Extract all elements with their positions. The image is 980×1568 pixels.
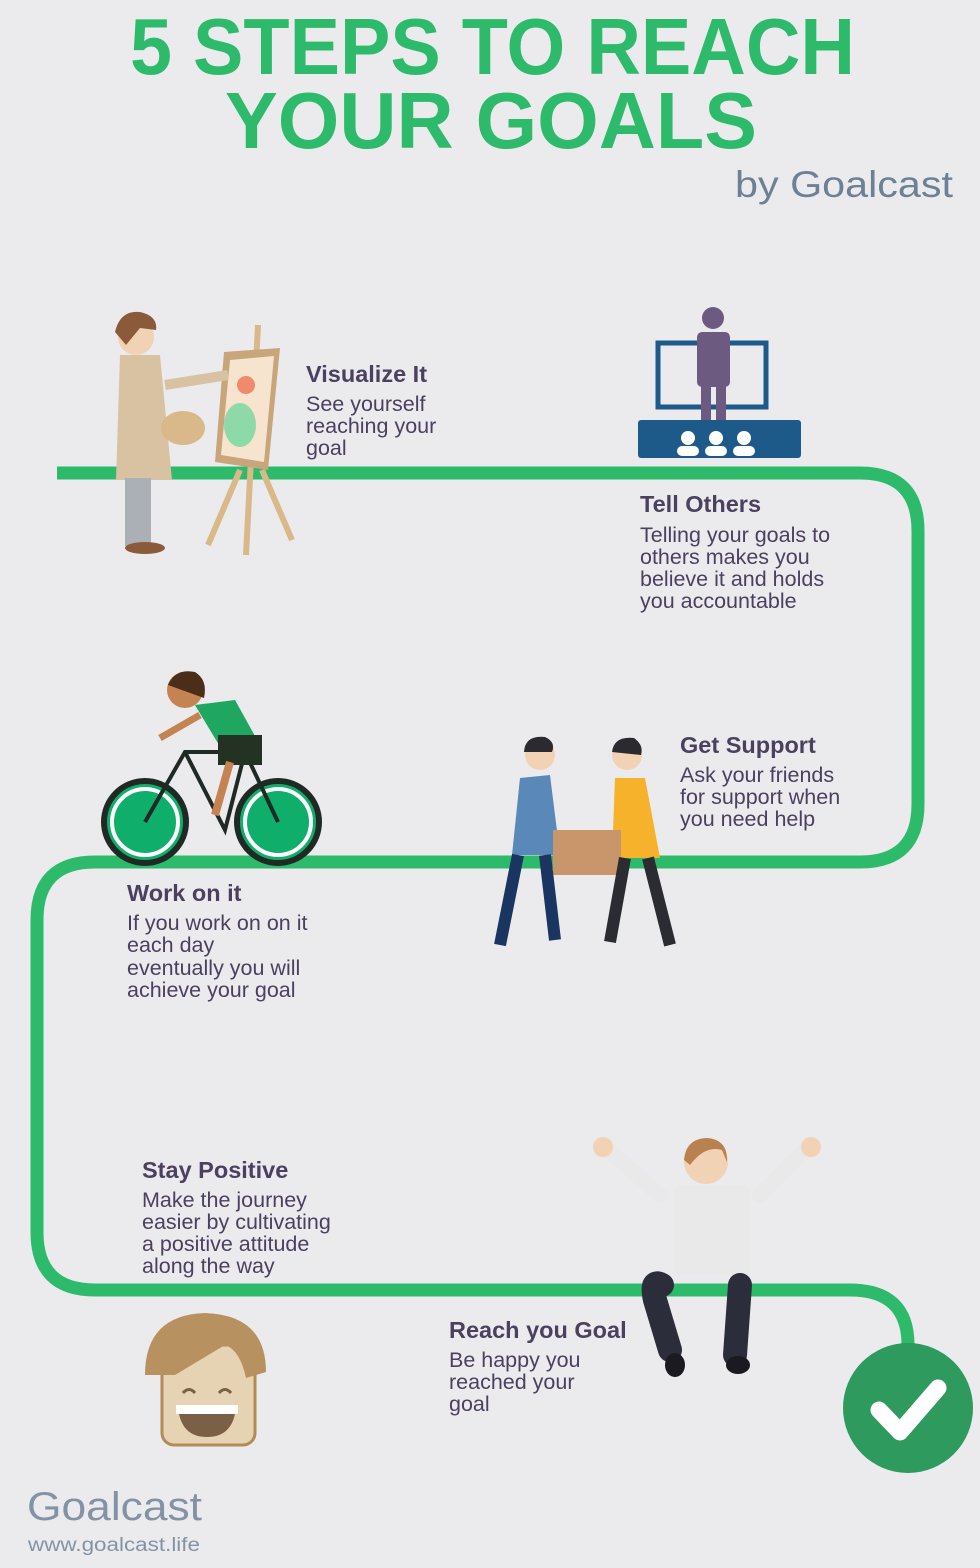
heading: Visualize It: reaching your [306, 414, 436, 438]
heading: Stay Positive: Make the journey [142, 1188, 307, 1212]
heading: Work on it: If you work on on it [127, 911, 307, 935]
heading: Tell Others [640, 491, 830, 613]
green path [37, 473, 918, 1345]
heading: Visualize It: See yourself [306, 392, 426, 416]
heading: Work on it: each day [127, 933, 215, 957]
heading: Tell Others: you accountable [640, 589, 797, 613]
heading: Stay Positive: easier by cultivating [142, 1210, 331, 1234]
icon: two people carrying box [500, 737, 670, 945]
heading: Tell Others: Tell Others [640, 491, 761, 517]
heading: Tell Others: believe it and holds [640, 567, 824, 591]
heading: Stay Positive: Stay Positive [142, 1157, 288, 1183]
icon: cyclist [104, 671, 319, 863]
heading: Get Support [680, 732, 840, 831]
title [130, 2, 855, 165]
heading: Work on it [127, 880, 307, 1002]
heading: Visualize It: goal [306, 436, 347, 460]
heading: Visualize It [306, 361, 436, 460]
icon: smiling face [145, 1313, 266, 1445]
heading: Get Support: Get Support [680, 732, 816, 758]
heading: Work on it: eventually you will [127, 956, 300, 980]
subtitle: by Goalcast: by Goalcast [735, 164, 954, 205]
icon: presenter with audience [638, 307, 801, 458]
heading: Stay Positive [142, 1157, 331, 1278]
heading: Reach you Goal: goal [449, 1392, 490, 1416]
heading: Tell Others: others makes you [640, 545, 810, 569]
footer logo: www.goalcast.life [27, 1535, 200, 1556]
heading: Reach you Goal: Reach you Goal [449, 1317, 627, 1343]
heading: Stay Positive: a positive attitude [142, 1232, 309, 1256]
icon: cheering man [593, 1137, 821, 1377]
footer logo: Goalcast [27, 1485, 202, 1529]
heading: Reach you Goal: reached your [449, 1370, 574, 1394]
heading: Work on it: Work on it [127, 880, 242, 906]
heading: Visualize It: Visualize It [306, 361, 427, 387]
heading: Get Support: Ask your friends [680, 763, 834, 787]
title: 5 STEPS TO REACH [130, 2, 855, 91]
icon: painter with easel [115, 312, 292, 555]
footer logo [27, 1485, 202, 1556]
heading: Reach you Goal [449, 1317, 627, 1416]
heading: Get Support: for support when [680, 785, 840, 809]
icon: check circle [843, 1343, 973, 1473]
heading: Stay Positive: along the way [142, 1254, 275, 1278]
heading: Get Support: you need help [680, 807, 815, 831]
heading: Tell Others: Telling your goals to [640, 523, 830, 547]
title: YOUR GOALS [225, 76, 757, 165]
heading: Work on it: achieve your goal [127, 978, 296, 1002]
heading: Reach you Goal: Be happy you [449, 1348, 580, 1372]
